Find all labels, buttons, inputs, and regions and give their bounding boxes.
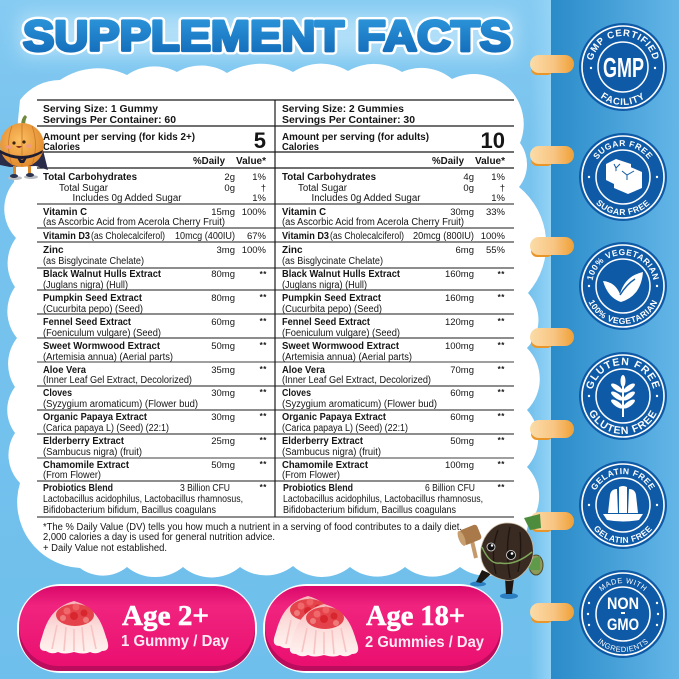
serving info: Servings Per Container: 30 (282, 115, 415, 126)
row: black walnut (282, 269, 505, 291)
row: vitamin D3: 67% (247, 231, 267, 242)
row: elderberry: Elderberry Extract (282, 436, 364, 447)
calories: Amount per serving (for adults) (282, 132, 429, 143)
row: sweet wormwood: 100mg (445, 341, 474, 352)
row: sweet wormwood: (Artemisia annua) (Aerial parts) (43, 352, 173, 363)
row: vitamin D3 (282, 231, 506, 242)
title: SUPPLEMENT FACTS (23, 12, 511, 60)
row: pumpkin seed: Pumpkin Seed Extract (282, 293, 382, 304)
calories: Calories (43, 142, 80, 153)
row: pumpkin seed (282, 293, 505, 315)
row: zinc: 100% (242, 245, 267, 256)
row: pumpkin seed: ** (498, 293, 505, 302)
row: total carbohydrates: Total Sugar (59, 183, 109, 194)
strip beside panel (530, 0, 551, 679)
row: chamomile: Chamomile Extract (282, 460, 369, 471)
badge: non-GMO: MADE WITH (598, 578, 647, 592)
badge: 100% vegetarian: 100% VEGETARIAN (588, 300, 658, 324)
badge: GMP certified: GMP (603, 52, 644, 83)
row: organic papaya: Organic Papaya Extract (282, 412, 387, 423)
row: organic papaya: (Carica papaya L) (Seed) (22:1) (282, 423, 408, 434)
table column: kids serving (43, 104, 267, 516)
daily value header: %Daily (193, 156, 225, 167)
row: pumpkin seed: Pumpkin Seed Extract (43, 293, 143, 304)
row: vitamin C: (as Ascorbic Acid from Acerola Cherry Fruit) (282, 217, 464, 228)
row: black walnut: (Juglans nigra) (Hull) (43, 280, 128, 291)
row: cloves: (Syzygium aromaticum) (Flower bud) (282, 399, 437, 410)
row: elderberry: Elderberry Extract (43, 436, 125, 447)
row: cloves: Cloves (282, 388, 311, 399)
row: black walnut: (Juglans nigra) (Hull) (282, 280, 367, 291)
row: total carbohydrates: Includes 0g Added Sugar (312, 193, 421, 204)
dosage text: 1 Gummy / Day (121, 633, 229, 650)
row: vitamin D3: 20mcg (800IU) (413, 231, 474, 242)
row: elderberry: ** (498, 436, 505, 445)
row: vitamin D3: Vitamin D3 (282, 231, 329, 242)
row: black walnut: Black Walnut Hulls Extract (282, 269, 401, 280)
row: vitamin D3: 10mcg (400IU) (175, 231, 235, 242)
daily value header: Value* (475, 156, 505, 167)
row: vitamin C: Vitamin C (282, 207, 326, 218)
daily value header: %Daily (432, 156, 464, 167)
row: aloe vera: ** (498, 365, 505, 374)
table column: adult serving (282, 104, 506, 516)
dosage text: Age 2+ (122, 601, 209, 632)
badge: gluten free: GLUTEN FREE (590, 410, 657, 434)
serving info: Servings Per Container: 60 (43, 115, 176, 126)
row: fennel seed: Fennel Seed Extract (43, 317, 132, 328)
row: fennel seed: ** (498, 317, 505, 326)
row: fennel seed: (Foeniculum vulgare) (Seed) (282, 328, 400, 339)
dosage text: 2 Gummies / Day (365, 634, 484, 651)
icon: walnut character (456, 514, 543, 599)
row: aloe vera: Aloe Vera (43, 365, 86, 376)
row: black walnut: 160mg (445, 269, 474, 280)
row: zinc: (as Bisglycinate Chelate) (43, 256, 144, 267)
row: pumpkin seed: 160mg (445, 293, 474, 304)
row: aloe vera: 35mg (211, 365, 235, 376)
row: total carbohydrates: † (500, 183, 505, 194)
badge: gelatin free: GELATIN FREE (594, 526, 652, 544)
row: organic papaya: ** (260, 412, 267, 421)
row: zinc: (as Bisglycinate Chelate) (282, 256, 383, 267)
row: chamomile: (From Flower) (43, 470, 101, 481)
row: sweet wormwood: ** (498, 341, 505, 350)
row: pumpkin seed: 80mg (211, 293, 235, 304)
row: vitamin C: (as Ascorbic Acid from Acerola Cherry Fruit) (43, 217, 225, 228)
pill: age 2+ dosage (17, 584, 257, 673)
row: vitamin C: 33% (486, 207, 506, 218)
row: cloves: 30mg (211, 388, 235, 399)
row: total carbohydrates: 2g (224, 172, 235, 183)
row: pumpkin seed: (Cucurbita pepo) (Seed) (43, 304, 143, 315)
serving info (43, 104, 176, 126)
row: total carbohydrates: 4g (463, 172, 474, 183)
row: probiotics blend: Lactobacillus acidophilus, Lactobacillus rhamnosus, (283, 494, 483, 505)
row: elderberry (43, 436, 267, 458)
row: zinc: Zinc (282, 245, 303, 256)
row: aloe vera: Aloe Vera (282, 365, 325, 376)
row: vitamin C: 30mg (450, 207, 474, 218)
badge: GMP certified: GMP CERTIFIED (587, 29, 658, 60)
row: organic papaya: 60mg (450, 412, 474, 423)
row: total carbohydrates: Includes 0g Added Sugar (72, 193, 182, 204)
row: black walnut: Black Walnut Hulls Extract (43, 269, 162, 280)
row: chamomile: (From Flower) (282, 470, 340, 481)
row: vitamin D3 (43, 231, 267, 242)
row: elderberry: 50mg (450, 436, 474, 447)
row: probiotics blend: Bifidobacterium bifidum, Bacillus coagulans (283, 505, 456, 516)
row: elderberry: (Sambucus nigra) (fruit) (282, 447, 381, 458)
row: sweet wormwood: Sweet Wormwood Extract (282, 341, 400, 352)
row: probiotics blend: 6 Billion CFU (425, 483, 475, 494)
panel: certification sidebar background (551, 0, 679, 679)
dosage text: Age 18+ (366, 601, 465, 632)
row: organic papaya: 30mg (211, 412, 235, 423)
daily value header: Value* (236, 156, 266, 167)
row: fennel seed: ** (260, 317, 267, 326)
badge: sugar free (579, 133, 667, 221)
row: vitamin D3: (as Cholecalciferol) (330, 231, 404, 242)
row: fennel seed (282, 317, 505, 339)
icon: two gummies (274, 596, 358, 656)
badge: sugar free: SUGAR FREE (594, 140, 653, 159)
row: sweet wormwood: (Artemisia annua) (Aerial parts) (282, 352, 412, 363)
row: vitamin C (282, 207, 506, 228)
row: sweet wormwood (43, 341, 267, 363)
row: fennel seed: Fennel Seed Extract (282, 317, 371, 328)
row: total carbohydrates (43, 172, 267, 204)
title glow (20, 14, 515, 56)
serving info: Serving Size: 2 Gummies (282, 104, 404, 115)
row: vitamin C: Vitamin C (43, 207, 87, 218)
row: total carbohydrates: 0g (463, 183, 474, 194)
row: chamomile: ** (498, 460, 505, 469)
icon: gummy (40, 601, 108, 654)
row: pumpkin seed (43, 293, 267, 315)
row: aloe vera: ** (260, 365, 267, 374)
row: sweet wormwood: Sweet Wormwood Extract (43, 341, 161, 352)
supplement facts table rules (37, 100, 514, 517)
row: vitamin C: 100% (242, 207, 267, 218)
row: total carbohydrates: Total Sugar (298, 183, 348, 194)
row: cloves: Cloves (43, 388, 72, 399)
row: zinc (43, 245, 267, 267)
title: SUPPLEMENT FACTS (23, 12, 511, 60)
row: cloves: 60mg (450, 388, 474, 399)
row: probiotics blend (43, 483, 267, 516)
row: aloe vera: 70mg (450, 365, 474, 376)
row: probiotics blend: Lactobacillus acidophilus, Lactobacillus rhamnosus, (43, 494, 243, 505)
row: elderberry: ** (260, 436, 267, 445)
badge: non-GMO: INGREDIENTS (598, 638, 648, 652)
row: vitamin C (43, 207, 267, 228)
daily value header (432, 156, 505, 167)
row: cloves: (Syzygium aromaticum) (Flower bud) (43, 399, 198, 410)
row: total carbohydrates: † (261, 183, 266, 194)
row: cloves (282, 388, 505, 410)
row: zinc: 3mg (217, 245, 235, 256)
row: black walnut: ** (260, 270, 267, 279)
row: pumpkin seed: ** (260, 293, 267, 302)
row: fennel seed (43, 317, 267, 339)
row: chamomile (282, 460, 505, 481)
row: cloves: ** (498, 388, 505, 397)
row: chamomile (43, 460, 267, 481)
row: black walnut: 80mg (211, 269, 235, 280)
row: cloves (43, 388, 267, 410)
badge: gelatin free (579, 461, 667, 549)
badge: gluten free: GLUTEN FREE (586, 358, 660, 389)
row: aloe vera (282, 365, 505, 386)
binder rings (530, 55, 574, 623)
daily value header (193, 156, 266, 167)
badge: GMP certified: FACILITY (600, 92, 643, 105)
row: vitamin D3: 100% (481, 231, 506, 242)
badge: sugar free: SUGAR FREE (596, 200, 650, 216)
row: sweet wormwood: ** (260, 341, 267, 350)
row: chamomile: 50mg (211, 460, 235, 471)
row: pumpkin seed: (Cucurbita pepo) (Seed) (282, 304, 382, 315)
row: total carbohydrates: 0g (224, 183, 235, 194)
row: total carbohydrates: Total Carbohydrates (282, 172, 376, 183)
row: chamomile: 100mg (445, 460, 474, 471)
row: zinc: Zinc (43, 245, 64, 256)
badge: gluten free (579, 352, 667, 440)
row: probiotics blend: 3 Billion CFU (180, 483, 230, 494)
badge: gelatin free: GELATIN FREE (592, 468, 655, 490)
row: vitamin C: 15mg (211, 207, 235, 218)
footnote: 2,000 calories a day is used for general nutrition advice. (43, 532, 275, 543)
row: zinc (282, 245, 506, 267)
badge: non-GMO (579, 570, 667, 658)
row: vitamin D3: Vitamin D3 (43, 231, 90, 242)
row: fennel seed: 60mg (211, 317, 235, 328)
row: elderberry (282, 436, 505, 458)
calories: Amount per serving (for kids 2+) (43, 132, 195, 143)
row: probiotics blend: ** (498, 483, 505, 492)
row: black walnut: ** (498, 270, 505, 279)
row: probiotics blend: ** (260, 483, 267, 492)
row: organic papaya (43, 412, 267, 434)
footnote: *The % Daily Value (DV) tells you how much a nutrient in a serving of food contributes to a daily diet. (43, 522, 462, 533)
pill: age 18+ dosage (263, 584, 503, 673)
row: total carbohydrates: 1% (252, 193, 267, 204)
row: total carbohydrates (282, 172, 506, 204)
row: organic papaya: Organic Papaya Extract (43, 412, 148, 423)
row: probiotics blend (283, 483, 505, 516)
footnote: + Daily Value not established. (43, 543, 167, 554)
row: sweet wormwood: 50mg (211, 341, 235, 352)
calories: 5 (254, 128, 266, 153)
row: probiotics blend: Bifidobacterium bifidum, Bacillus coagulans (43, 505, 216, 516)
serving info (282, 104, 415, 126)
calories: Calories (282, 142, 319, 153)
row: chamomile: Chamomile Extract (43, 460, 130, 471)
footnote (43, 522, 462, 554)
calories: 10 (481, 128, 505, 153)
row: chamomile: ** (260, 460, 267, 469)
row: elderberry: (Sambucus nigra) (fruit) (43, 447, 142, 458)
row: vitamin D3: (as Cholecalciferol) (91, 231, 165, 242)
row: aloe vera: (Inner Leaf Gel Extract, Decolorized) (282, 375, 431, 386)
dosage text (365, 601, 484, 651)
badge: non-GMO: NON (607, 594, 639, 613)
panel: cloud background (4, 64, 546, 577)
row: zinc: 6mg (456, 245, 474, 256)
row: aloe vera: (Inner Leaf Gel Extract, Decolorized) (43, 375, 192, 386)
badge: GMP certified (579, 23, 667, 111)
badge: 100% vegetarian: 100% VEGETARIAN (587, 249, 659, 280)
row: fennel seed: 120mg (445, 317, 474, 328)
row: aloe vera (43, 365, 267, 386)
dosage text (121, 601, 229, 650)
serving info: Serving Size: 1 Gummy (43, 104, 158, 115)
badge: 100% vegetarian (579, 242, 667, 330)
row: cloves: ** (260, 388, 267, 397)
badge: non-GMO: GMO (607, 615, 639, 634)
row: fennel seed: (Foeniculum vulgare) (Seed) (43, 328, 161, 339)
calories (282, 128, 505, 153)
row: sweet wormwood (282, 341, 505, 363)
row: total carbohydrates: 1% (491, 172, 506, 183)
row: black walnut (43, 269, 267, 291)
row: zinc: 55% (486, 245, 506, 256)
row: organic papaya: ** (498, 412, 505, 421)
row: total carbohydrates: 1% (491, 193, 506, 204)
row: total carbohydrates: Total Carbohydrates (43, 172, 137, 183)
row: elderberry: 25mg (211, 436, 235, 447)
row: total carbohydrates: 1% (252, 172, 267, 183)
row: probiotics blend: Probiotics Blend (43, 483, 113, 494)
row: organic papaya: (Carica papaya L) (Seed) (22:1) (43, 423, 169, 434)
row: organic papaya (282, 412, 505, 434)
icon: pumpkin character (0, 115, 48, 180)
calories (43, 128, 266, 153)
row: probiotics blend: Probiotics Blend (283, 483, 353, 494)
